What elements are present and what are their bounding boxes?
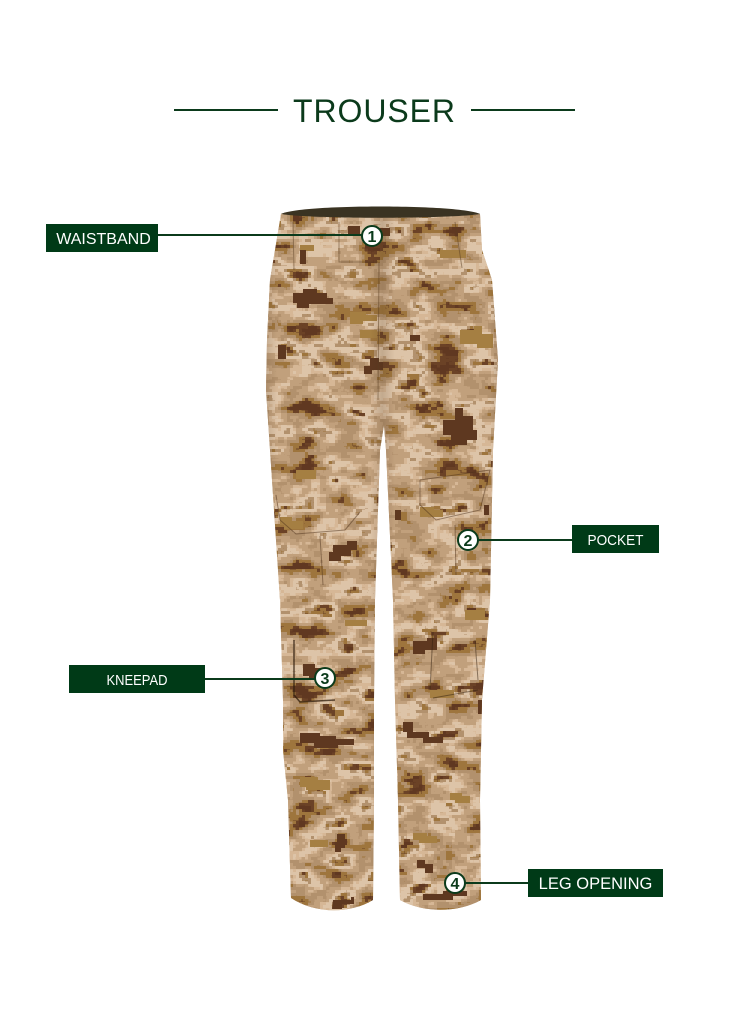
label text: POCKET	[588, 532, 644, 549]
label text: WAISTBAND	[56, 231, 151, 248]
number marker 2	[458, 530, 478, 550]
number marker 2: 2	[464, 533, 473, 550]
label text: KNEEPAD	[106, 672, 168, 689]
number marker 3	[315, 668, 335, 688]
callout: pocket	[458, 525, 659, 553]
belt loops and fly	[293, 222, 462, 400]
left kneepad	[294, 640, 335, 702]
number marker 4	[445, 873, 465, 893]
leader line	[205, 678, 316, 680]
leader line	[478, 539, 572, 541]
label box	[46, 224, 158, 252]
trousers illustration	[260, 200, 505, 920]
number marker 4: 4	[451, 876, 460, 893]
label box	[572, 525, 659, 553]
camouflage fabric	[260, 200, 505, 920]
label text: LEG OPENING	[539, 875, 652, 893]
title rule left	[174, 109, 278, 111]
ochre patches	[280, 245, 493, 847]
callout: waistband	[46, 224, 382, 252]
number marker 3: 3	[321, 671, 330, 688]
callout: kneepad	[69, 665, 335, 693]
label box	[69, 665, 205, 693]
leader line	[158, 234, 363, 236]
right cargo pocket	[420, 470, 490, 575]
label box	[528, 869, 663, 897]
title rule right	[471, 109, 575, 111]
left cargo pocket	[276, 495, 360, 585]
right kneepad	[430, 632, 478, 698]
number marker 1	[362, 226, 382, 246]
number marker 1: 1	[368, 229, 377, 246]
brown patches	[278, 226, 489, 909]
callout: leg opening	[445, 869, 663, 897]
title text: TROUSER	[293, 93, 455, 129]
inner waistband	[281, 206, 480, 218]
leader line	[465, 882, 528, 884]
